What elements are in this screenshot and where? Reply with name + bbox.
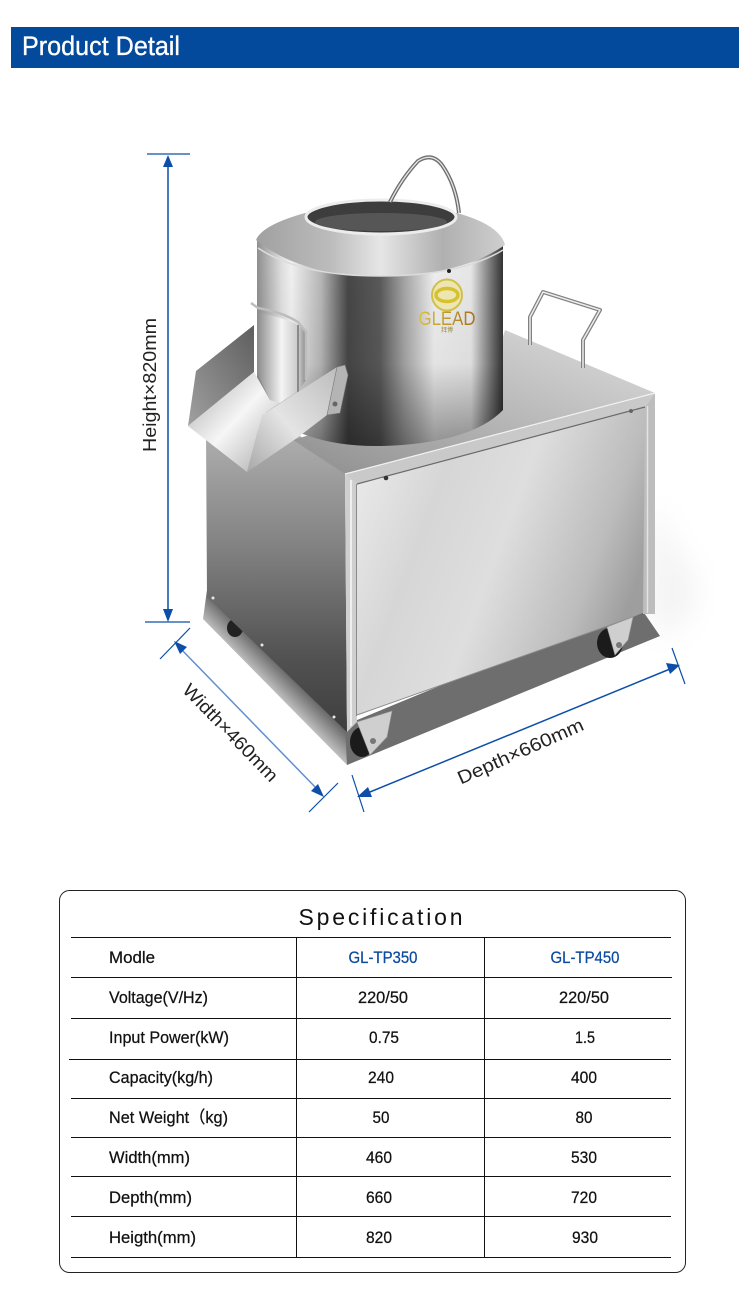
floor shadow front side bbox=[345, 604, 660, 765]
floor shadow left side bbox=[203, 590, 350, 765]
table grid bbox=[69, 937, 672, 1258]
water hose bbox=[390, 157, 459, 213]
row: height: 930 bbox=[572, 1228, 598, 1247]
rear caster wheel bbox=[227, 619, 243, 637]
product illustration: potato peeler machine bbox=[188, 157, 700, 765]
row: height bbox=[109, 1228, 598, 1247]
row: input power: Input Power(kW) bbox=[109, 1028, 229, 1047]
row: depth: 720 bbox=[571, 1188, 597, 1207]
cabinet top surface bbox=[293, 330, 655, 474]
width label: Width×460mm bbox=[179, 679, 283, 786]
row: height: 820 bbox=[366, 1228, 392, 1247]
title bar bbox=[11, 27, 739, 68]
row: input power bbox=[109, 1028, 595, 1047]
depth dimension bbox=[352, 648, 685, 812]
GLEAD logo: GLEAD bbox=[418, 309, 476, 330]
cabinet handle bbox=[530, 292, 600, 368]
row: voltage: 220/50 bbox=[559, 988, 609, 1007]
row: model bbox=[109, 948, 620, 967]
row: net weight: 80 bbox=[576, 1108, 592, 1127]
row: capacity bbox=[109, 1068, 597, 1087]
row: capacity: 240 bbox=[368, 1068, 394, 1087]
row: width: 460 bbox=[366, 1148, 392, 1167]
row: capacity: 400 bbox=[571, 1068, 597, 1087]
row: width: Width(mm) bbox=[109, 1148, 190, 1167]
lid seam bbox=[258, 248, 503, 276]
steel drum body bbox=[257, 240, 503, 446]
drum lid cone bbox=[256, 213, 505, 276]
specification panel bbox=[60, 890, 686, 1272]
soft ground glow right of cabinet bbox=[650, 500, 700, 630]
side door on drum bbox=[251, 303, 306, 403]
front left caster wheel bbox=[350, 711, 392, 757]
height label: Height×820mm bbox=[139, 318, 160, 452]
row: input power: 1.5 bbox=[575, 1028, 595, 1047]
width dimension bbox=[160, 628, 338, 812]
row: height: Heigth(mm) bbox=[109, 1228, 196, 1247]
left cabinet panel bbox=[206, 430, 347, 732]
row: width: 530 bbox=[571, 1148, 597, 1167]
row: depth bbox=[109, 1188, 597, 1207]
row: net weight: 50 bbox=[372, 1108, 390, 1127]
GLEAD logo bbox=[418, 269, 476, 334]
row: net weight bbox=[109, 1108, 592, 1127]
title text: Product Detail bbox=[22, 31, 180, 61]
height dimension bbox=[139, 154, 190, 622]
row: model: GL-TP450 bbox=[550, 948, 620, 967]
row: input power: 0.75 bbox=[369, 1028, 399, 1047]
row: depth: 660 bbox=[366, 1188, 392, 1207]
discharge chute bbox=[188, 325, 348, 472]
specification heading: Specification bbox=[298, 904, 462, 930]
front right caster wheel bbox=[597, 617, 633, 658]
row: model: GL-TP350 bbox=[348, 948, 418, 967]
row: voltage: Voltage(V/Hz) bbox=[109, 988, 208, 1007]
row: capacity: Capacity(kg/h) bbox=[109, 1068, 213, 1087]
row: voltage: 220/50 bbox=[358, 988, 408, 1007]
GLEAD logo: 拜博 bbox=[441, 326, 453, 334]
cabinet rivets bbox=[212, 596, 336, 718]
row: model: Modle bbox=[109, 948, 155, 967]
row: net weight: Net Weight（kg) bbox=[109, 1108, 228, 1127]
cabinet corner strips bbox=[345, 393, 655, 732]
row: voltage bbox=[109, 988, 609, 1007]
feed opening bbox=[306, 200, 456, 234]
front cabinet panel bbox=[357, 407, 645, 715]
depth label: Depth×660mm bbox=[454, 714, 587, 788]
row: width bbox=[109, 1148, 597, 1167]
row: depth: Depth(mm) bbox=[109, 1188, 192, 1207]
